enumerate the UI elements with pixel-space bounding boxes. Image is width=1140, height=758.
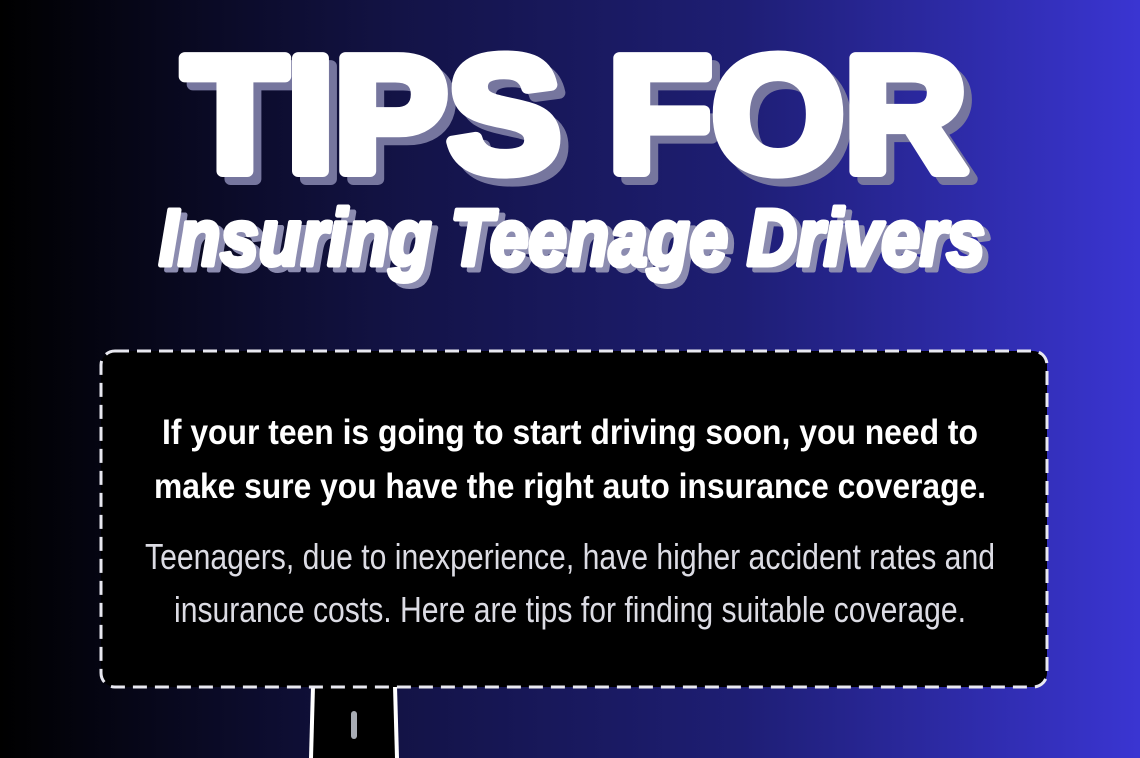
intro bold text: If your teen is going to start driving soon, you need to	[162, 413, 978, 452]
road center dash	[351, 711, 357, 739]
subtitle: Insuring Teenage Drivers: Insuring Teenage Drivers	[165, 198, 991, 287]
intro body text	[145, 536, 995, 630]
intro body text: insurance costs. Here are tips for finding suitable coverage.	[174, 589, 966, 630]
title: TIPS FOR: TIPS FOR	[183, 23, 967, 206]
subtitle: Insuring Teenage Drivers: Insuring Teenage Drivers	[159, 193, 985, 282]
road below intro box	[311, 686, 397, 758]
panel: intro box	[101, 351, 1047, 687]
intro bold text: make sure you have the right auto insurance coverage.	[154, 467, 986, 506]
intro body text: Teenagers, due to inexperience, have higher accident rates and	[145, 536, 995, 577]
title: TIPS FOR: TIPS FOR	[191, 31, 975, 214]
intro bold text	[154, 413, 986, 506]
